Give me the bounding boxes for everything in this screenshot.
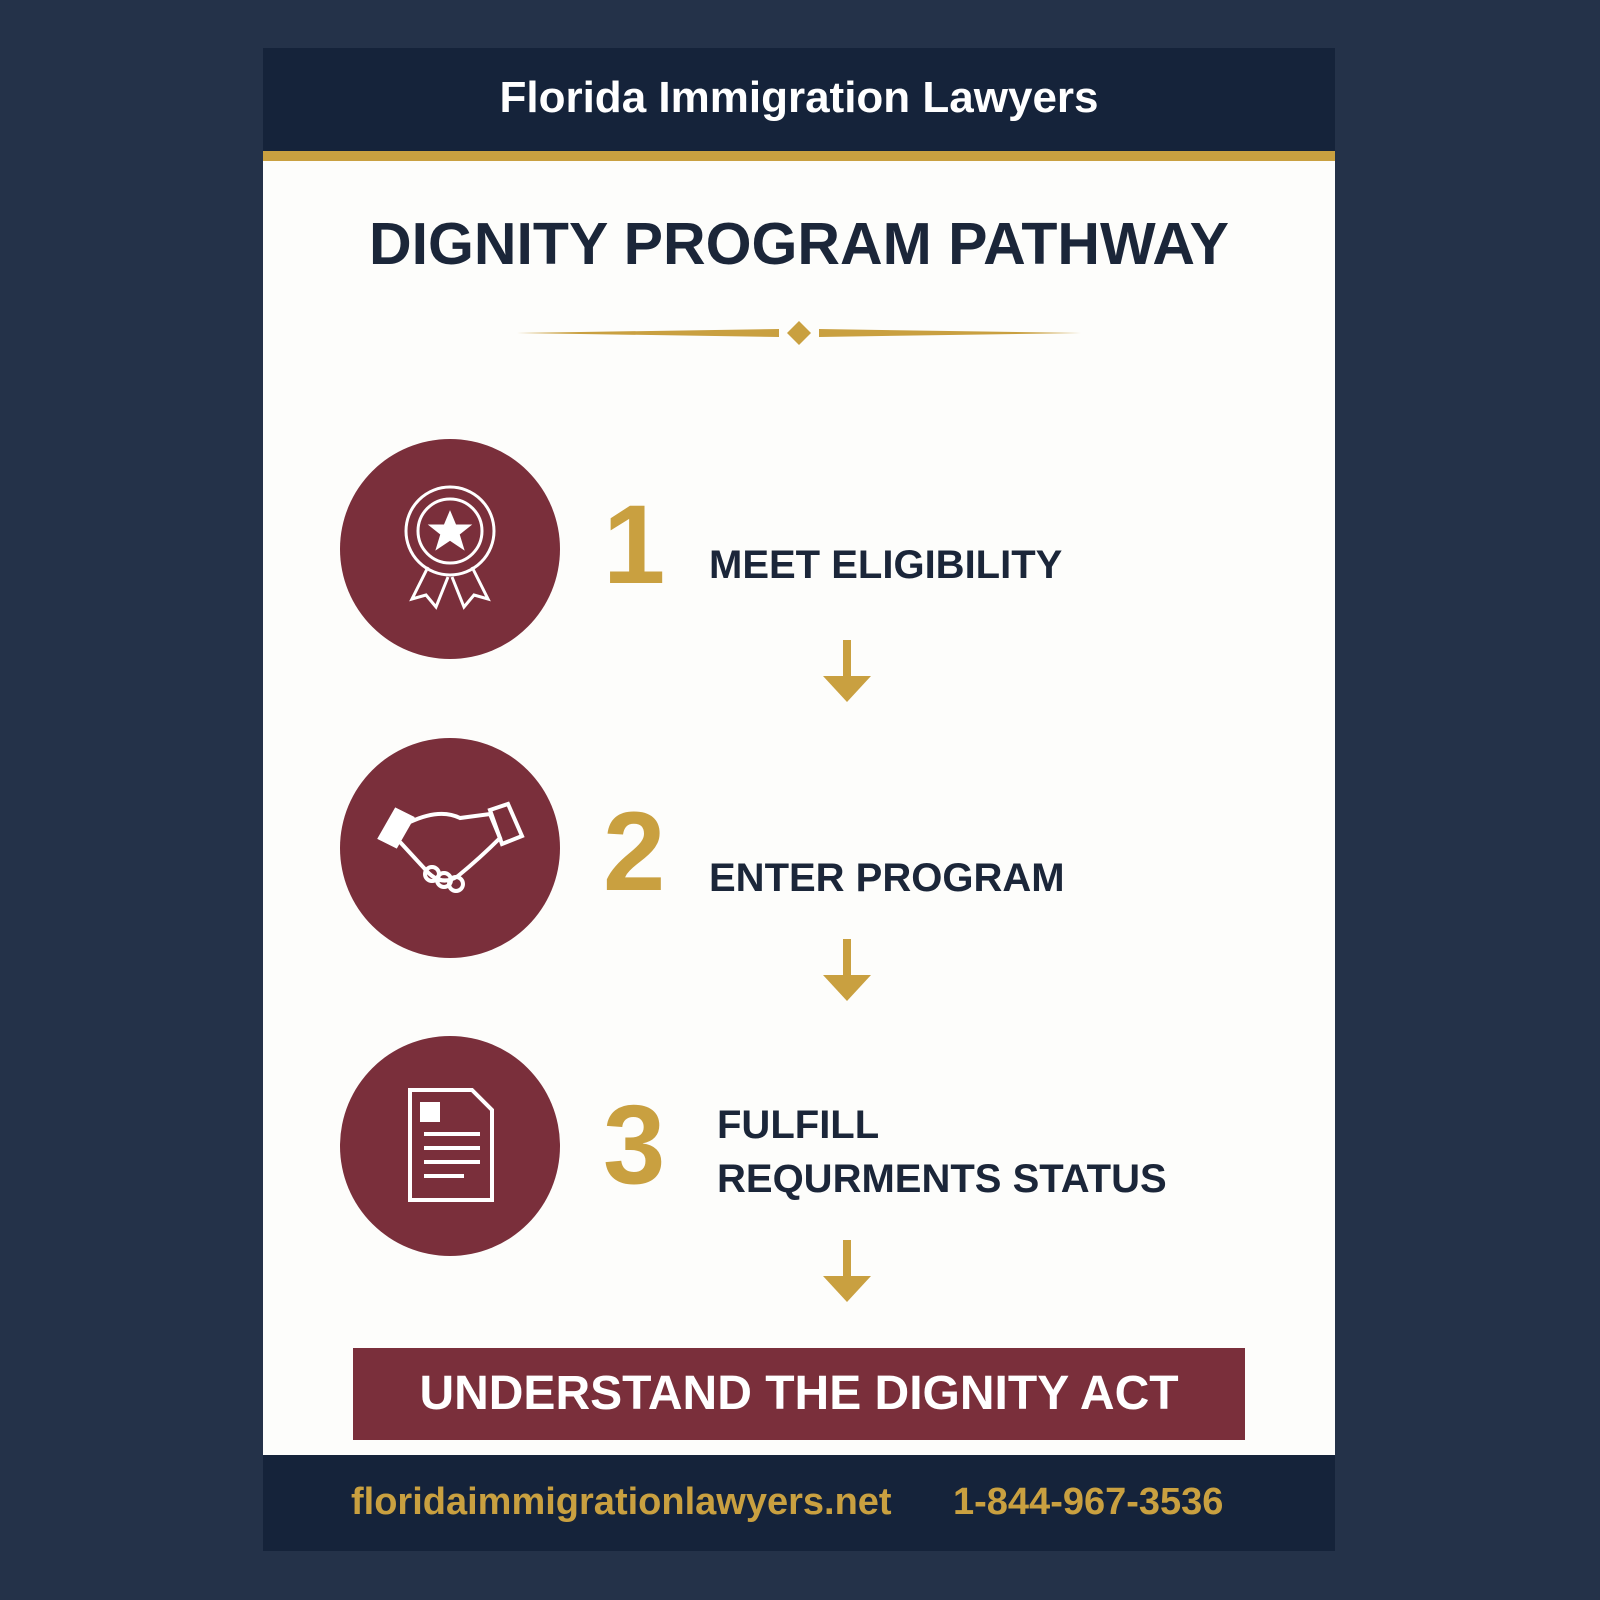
step 3 label bbox=[717, 1103, 1167, 1201]
title: DIGNITY PROGRAM PATHWAY bbox=[369, 211, 1229, 277]
step 2 icon: handshake bbox=[340, 738, 560, 958]
website: floridaimmigrationlawyers.net bbox=[351, 1481, 892, 1523]
arrow 1 bbox=[823, 640, 871, 702]
step 1 icon: award bbox=[340, 439, 560, 659]
arrow 3 bbox=[823, 1240, 871, 1302]
step 3 icon: document bbox=[340, 1036, 560, 1256]
step 3 label: FULFILL bbox=[717, 1103, 879, 1147]
header bar: Florida Immigration Lawyers bbox=[499, 73, 1099, 122]
step 2 label: ENTER PROGRAM bbox=[709, 856, 1065, 900]
step 3 number: 3 bbox=[603, 1082, 665, 1207]
card bbox=[263, 48, 1335, 1551]
banner: UNDERSTAND THE DIGNITY ACT bbox=[419, 1367, 1179, 1420]
banner bbox=[353, 1348, 1245, 1440]
step 2 number: 2 bbox=[603, 789, 665, 914]
gold rule bbox=[263, 151, 1335, 161]
phone: 1-844-967-3536 bbox=[953, 1481, 1223, 1523]
step 1 label: MEET ELIGIBILITY bbox=[709, 543, 1062, 587]
footer bbox=[263, 1455, 1335, 1551]
arrow 2 bbox=[823, 939, 871, 1001]
header bar bbox=[263, 48, 1335, 151]
divider ornament bbox=[518, 321, 1080, 345]
step 3 label: REQURMENTS STATUS bbox=[717, 1157, 1167, 1201]
step 1 number: 1 bbox=[603, 482, 665, 607]
